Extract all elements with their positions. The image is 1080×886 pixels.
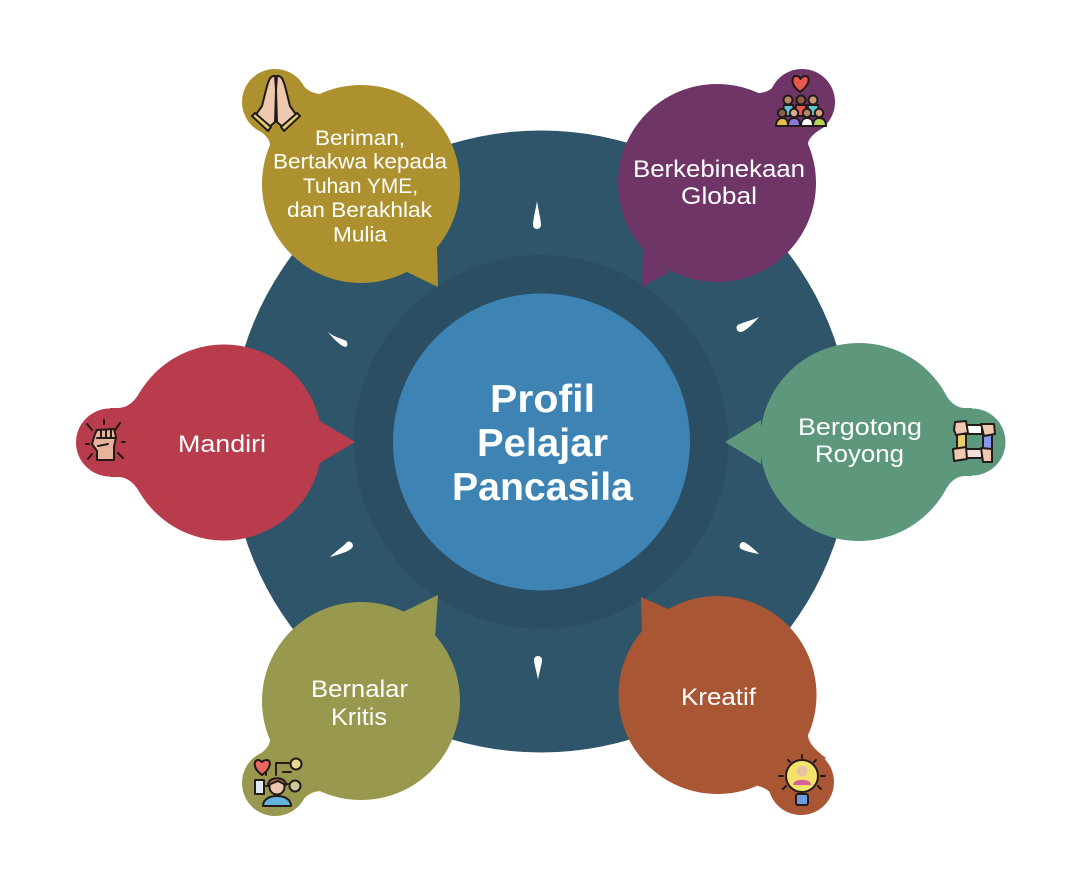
text: Beriman label: Tuhan YME, (303, 175, 418, 198)
panel: Berkebinekaan Global (618, 69, 835, 287)
icon: heart and people (776, 76, 826, 126)
text: Kreatif label: Kreatif (681, 684, 756, 711)
panel: Bernalar Kritis (242, 595, 460, 816)
panel: Bergotong Royong (725, 343, 1006, 541)
text: Beriman label (273, 127, 447, 246)
panel: Mandiri (76, 344, 355, 540)
heading: Profil Pelajar Pancasila (452, 378, 633, 509)
text: Bernalar Kritis label (311, 676, 408, 731)
icon: person thinking (255, 758, 302, 806)
text: Bergotong Royong label: Bergotong (798, 414, 922, 441)
icon: praying hands (252, 76, 300, 131)
text: Bergotong Royong label: Royong (815, 441, 904, 468)
icon: light bulb with person (779, 755, 825, 805)
white drop markers (327, 201, 759, 680)
panel: Kreatif (618, 596, 834, 815)
heading: Profil Pelajar Pancasila: Profil (490, 378, 595, 421)
text: Berkebinekaan Global label (633, 156, 805, 210)
text: Beriman label: dan Berakhlak (287, 199, 433, 222)
heading: Profil Pelajar Pancasila: Pancasila (452, 466, 633, 509)
inner ring (354, 255, 728, 629)
text: Beriman label: Mulia (333, 224, 387, 246)
text: Berkebinekaan Global label: Global (681, 183, 757, 210)
text: Bergotong Royong label (798, 414, 922, 468)
heading: Profil Pelajar Pancasila: Pelajar (477, 422, 608, 465)
panel: Beriman (242, 69, 460, 287)
text: Bernalar Kritis label: Kritis (331, 704, 387, 731)
text: Beriman label: Beriman, (315, 127, 405, 150)
text: Bernalar Kritis label: Bernalar (311, 676, 408, 703)
text: Mandiri label: Mandiri (178, 431, 266, 458)
panel: center circle (393, 294, 690, 590)
icon: raised fist (86, 420, 125, 460)
outer dark teal disc (230, 130, 852, 752)
icon: linked hands square (953, 421, 995, 462)
text: Beriman label: Bertakwa kepada (273, 150, 447, 174)
text: Berkebinekaan Global label: Berkebinekaan (633, 156, 805, 183)
